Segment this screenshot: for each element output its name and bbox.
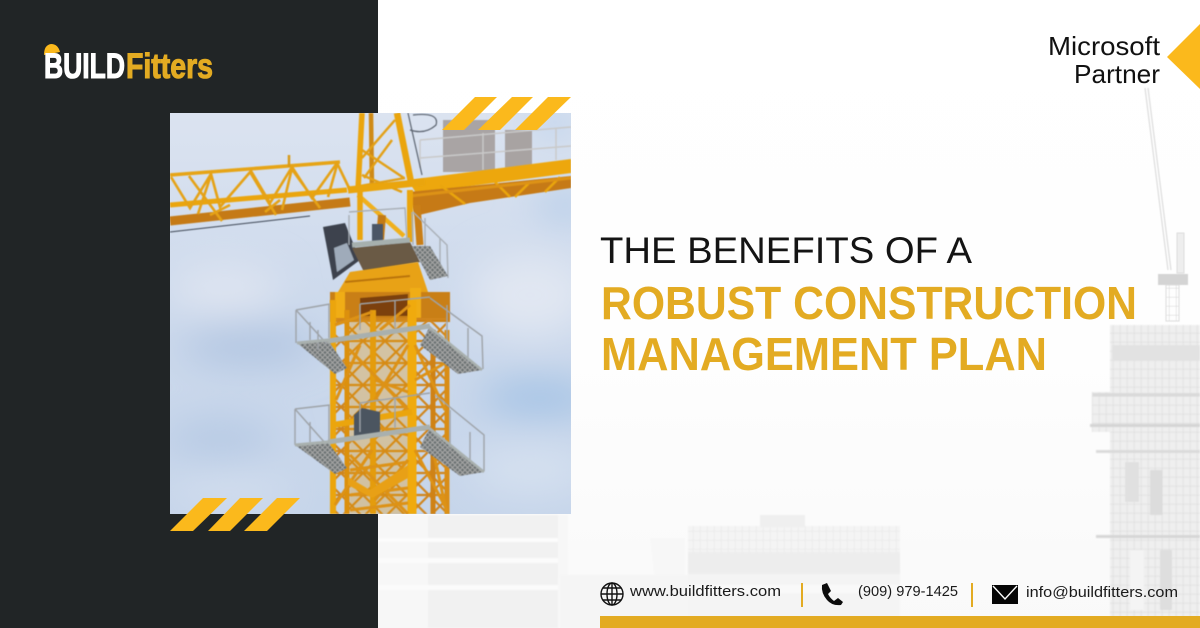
bottom hazard stripes [170, 498, 300, 531]
phone text: (909) 979-1425 [858, 584, 958, 600]
icon: envelope [992, 585, 1018, 604]
divider [971, 583, 973, 607]
icon: phone [822, 583, 843, 605]
watermark: tower crane [1145, 88, 1188, 321]
platform one [296, 297, 483, 374]
watermark: construction buildings [378, 325, 1200, 628]
tower lattice mast [333, 300, 447, 514]
title line one: THE BENEFITS OF A [600, 229, 972, 271]
page background [378, 0, 1200, 628]
website text: www.buildfitters.com [629, 584, 781, 600]
logo wordmark BUILD: BUILD [44, 47, 125, 86]
platform two [295, 393, 484, 476]
contact: phone [822, 583, 958, 605]
grey containers [420, 120, 571, 172]
mast ballast box [354, 408, 380, 438]
icon: globe [601, 583, 623, 605]
left jib [170, 155, 350, 232]
crane apex frame [348, 113, 437, 245]
email text: info@buildfitters.com [1026, 585, 1178, 601]
photo: tower crane against cloudy sky [165, 112, 600, 514]
footer gold bar [600, 616, 1200, 628]
partner label: Microsoft [1048, 31, 1161, 61]
upper platform and stairs [349, 208, 448, 280]
left dark panel [0, 0, 378, 628]
title line three: MANAGEMENT PLAN [601, 328, 1047, 380]
divider [801, 583, 803, 607]
operator cabin [323, 223, 383, 280]
title line two: ROBUST CONSTRUCTION [601, 277, 1137, 329]
partner label second line: Partner [1074, 59, 1160, 89]
contact: website [601, 583, 781, 605]
top hazard stripes [442, 97, 571, 130]
logo wordmark Fitters: Fitters [126, 47, 213, 86]
logo: BuildFitters [44, 44, 213, 86]
Microsoft Partner badge [1048, 31, 1161, 89]
icon: hard hat [44, 44, 60, 55]
right jib [408, 159, 571, 216]
tower head [330, 262, 450, 322]
contact: email [992, 585, 1178, 604]
corner diamond [1167, 24, 1200, 89]
title [600, 229, 1137, 380]
sky with clouds [165, 112, 600, 514]
